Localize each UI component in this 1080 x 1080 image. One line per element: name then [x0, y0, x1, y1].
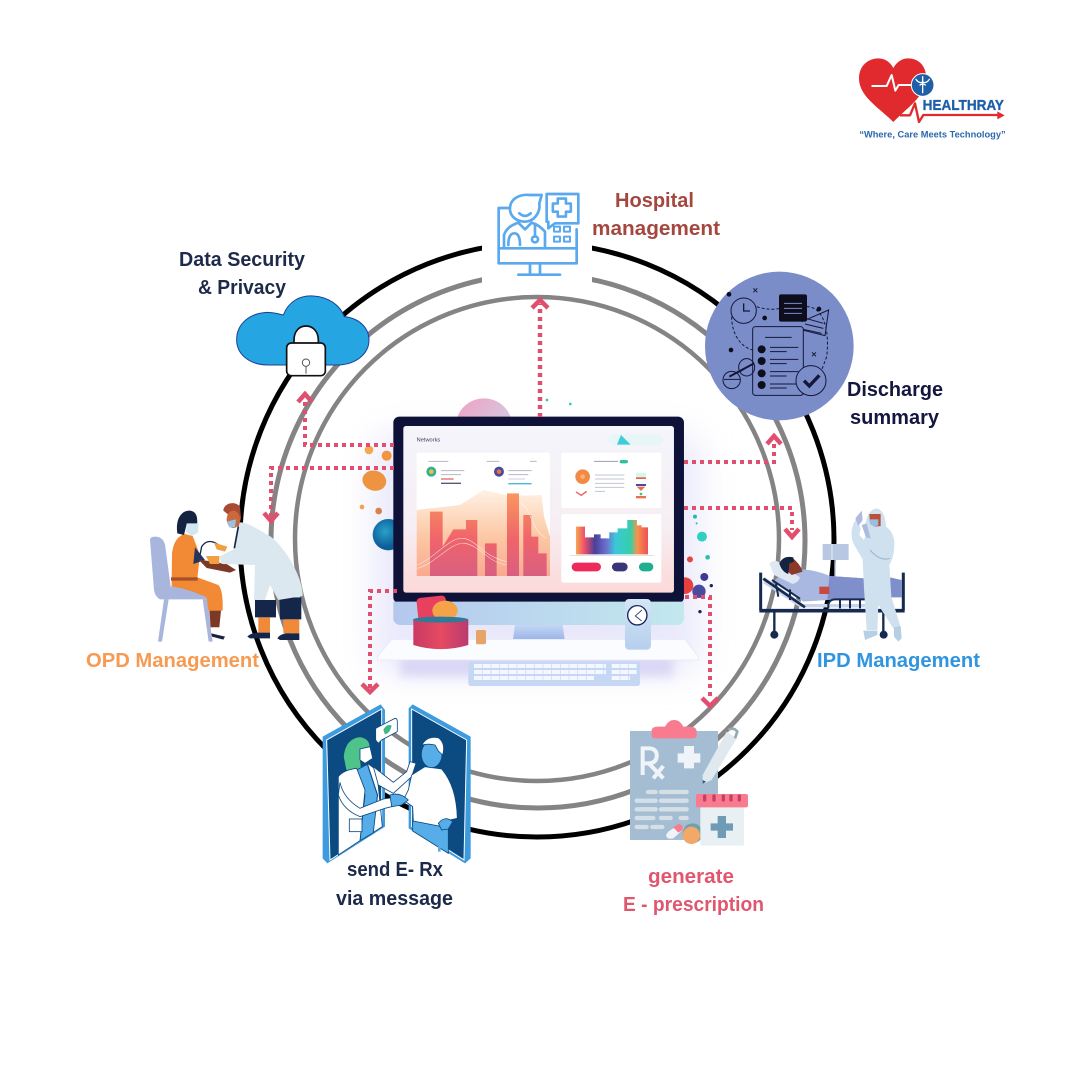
white backing behind hospital icon [482, 178, 592, 283]
label: send E-Rx via message: via message [336, 888, 453, 910]
monitor stand [503, 625, 578, 649]
logo: Healthray [859, 58, 1006, 140]
label: generate E-prescription: E - prescription [623, 894, 764, 916]
label: send E-Rx via message [336, 859, 453, 910]
arrow: to e-prescription [685, 597, 718, 706]
right phone [409, 704, 471, 863]
top search bar [608, 434, 663, 445]
monitor chin [393, 602, 684, 625]
label: discharge summary: summary [850, 407, 940, 429]
label: hospital management: Hospital [615, 190, 694, 212]
label: hospital management: management [592, 218, 720, 240]
medic in protective suit [852, 508, 902, 642]
icon: IPD patient bed and medic [759, 508, 905, 642]
screen [403, 426, 674, 593]
label: data security and privacy: Data Security [179, 249, 306, 271]
label: generate E-prescription: generate [648, 866, 734, 888]
arrow: to send E-Rx [362, 591, 397, 692]
label: OPD management: OPD Management [86, 650, 259, 672]
arrow: to IPD management [684, 508, 799, 537]
icon: cloud with padlock [237, 296, 369, 376]
patient [171, 511, 236, 640]
chair [150, 537, 213, 642]
monitor frame [393, 417, 684, 603]
medicine bottle [696, 794, 748, 846]
logo: Healthray: “Where, Care Meets Technology” [859, 130, 1006, 140]
message bubble [376, 718, 397, 743]
label: discharge summary [847, 379, 943, 429]
background glow [373, 433, 700, 673]
keyboard [468, 662, 640, 686]
Rx mark [643, 748, 663, 778]
icon: prescription clipboard [630, 720, 748, 846]
dotted connector arrows [264, 300, 799, 706]
arrow: to hospital management [532, 300, 548, 417]
logo: Healthray: HEALTHRAY [923, 97, 1004, 114]
small cup [476, 630, 486, 644]
label: IPD management: IPD Management [817, 650, 980, 672]
label: send E-Rx via message: send E- Rx [347, 859, 443, 881]
label: discharge summary: Discharge [847, 379, 943, 401]
pencil pot [413, 595, 468, 649]
arrow: to OPD management [264, 468, 394, 521]
bottom right bar chart panel [561, 514, 661, 583]
clipboard clip [652, 720, 697, 738]
label: data security and privacy: & Privacy [198, 277, 287, 299]
text lines [637, 792, 687, 827]
decorative bubbles [360, 398, 713, 613]
doctor [200, 503, 303, 640]
doctor figure [338, 737, 416, 855]
screen title: Networks [417, 438, 440, 444]
label: hospital management [592, 190, 720, 240]
monitor on pole [823, 544, 849, 580]
icon: discharge summary badge [705, 272, 854, 420]
label: data security and privacy [179, 249, 306, 299]
icon: hospital management doctor on screen [499, 194, 578, 275]
pen [703, 729, 737, 784]
left phone [323, 704, 385, 863]
central desktop illustration [360, 398, 713, 686]
arrow: to discharge summary [684, 436, 781, 462]
icon: OPD doctor checking patient [150, 503, 303, 642]
top right info panel [561, 453, 661, 508]
concentric rings [240, 243, 834, 837]
desk clock [625, 599, 651, 650]
plus mark [678, 746, 700, 768]
label: generate E-prescription [623, 866, 764, 916]
arrow: to data security [298, 394, 394, 445]
pills [666, 823, 703, 844]
desk [377, 639, 698, 660]
patient figure [390, 737, 457, 853]
clipboard sheet [630, 731, 718, 840]
desk shadow [400, 657, 673, 677]
icon: doctor and patient on two phones [323, 704, 471, 863]
main area chart panel [417, 453, 550, 576]
hospital bed [759, 557, 905, 639]
